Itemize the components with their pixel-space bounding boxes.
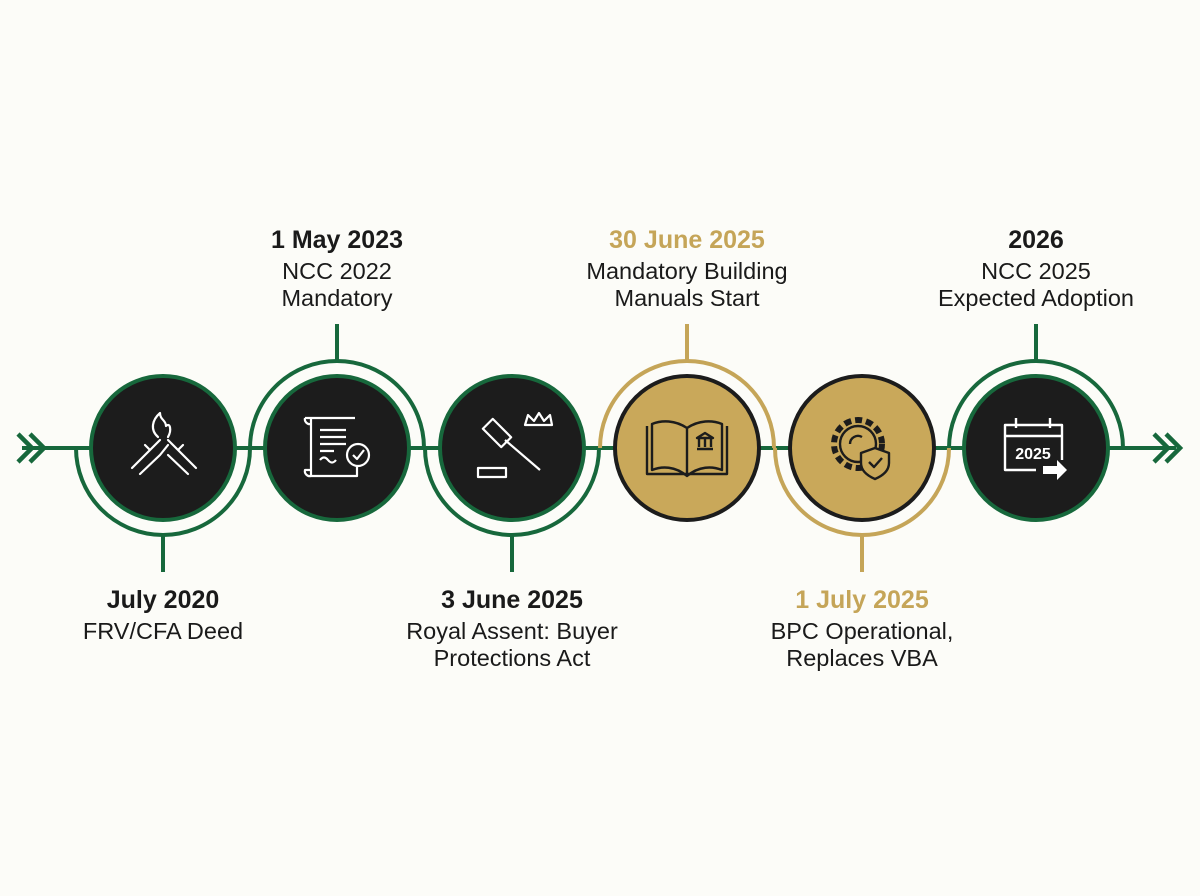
label: July 2020: [83, 586, 243, 644]
label: 2026: 2026: [1008, 226, 1064, 254]
label: 3 June 2025: Royal Assent: Buyer: [406, 618, 618, 644]
arrow: left chevrons: [18, 434, 44, 462]
label: 1 July 2025: Replaces VBA: [786, 645, 938, 671]
label: 30 June 2025: Manuals Start: [614, 285, 759, 311]
label: July 2020: July 2020: [107, 586, 219, 614]
label: 30 June 2025: Mandatory Building: [586, 258, 788, 284]
label: 2026: NCC 2025: [981, 258, 1091, 284]
circle 1: hands fire: [91, 376, 235, 520]
label: 1 July 2025: BPC Operational,: [771, 618, 953, 644]
label: 1 July 2025: [771, 586, 953, 671]
label: 1 July 2025: 1 July 2025: [795, 586, 929, 614]
circle 2: scroll with check: [265, 376, 409, 520]
label: 1 May 2023: NCC 2022: [282, 258, 392, 284]
label: 2026: [938, 226, 1134, 311]
circle 5: gear with shield: [790, 376, 934, 520]
timeline line: [22, 446, 1176, 450]
circle 6: calendar 2025: [964, 376, 1108, 520]
label: 2026: Expected Adoption: [938, 285, 1134, 311]
arrow: right chevrons: [1154, 434, 1180, 462]
label: 30 June 2025: 30 June 2025: [609, 226, 765, 254]
ring arcs and connectors: [76, 324, 1123, 572]
circle 3: gavel crown: [440, 376, 584, 520]
circle 4: book with building: [615, 376, 759, 520]
label: 1 May 2023: 1 May 2023: [271, 226, 403, 254]
label: 1 May 2023: Mandatory: [281, 285, 393, 311]
circle 6: calendar 2025: 2025: [1015, 446, 1051, 463]
label: 1 May 2023: [271, 226, 403, 311]
label: 30 June 2025: [586, 226, 788, 311]
label: July 2020: FRV/CFA Deed: [83, 618, 243, 644]
label: 3 June 2025: Protections Act: [434, 645, 590, 671]
label: 3 June 2025: 3 June 2025: [441, 586, 583, 614]
label: 3 June 2025: [406, 586, 618, 671]
